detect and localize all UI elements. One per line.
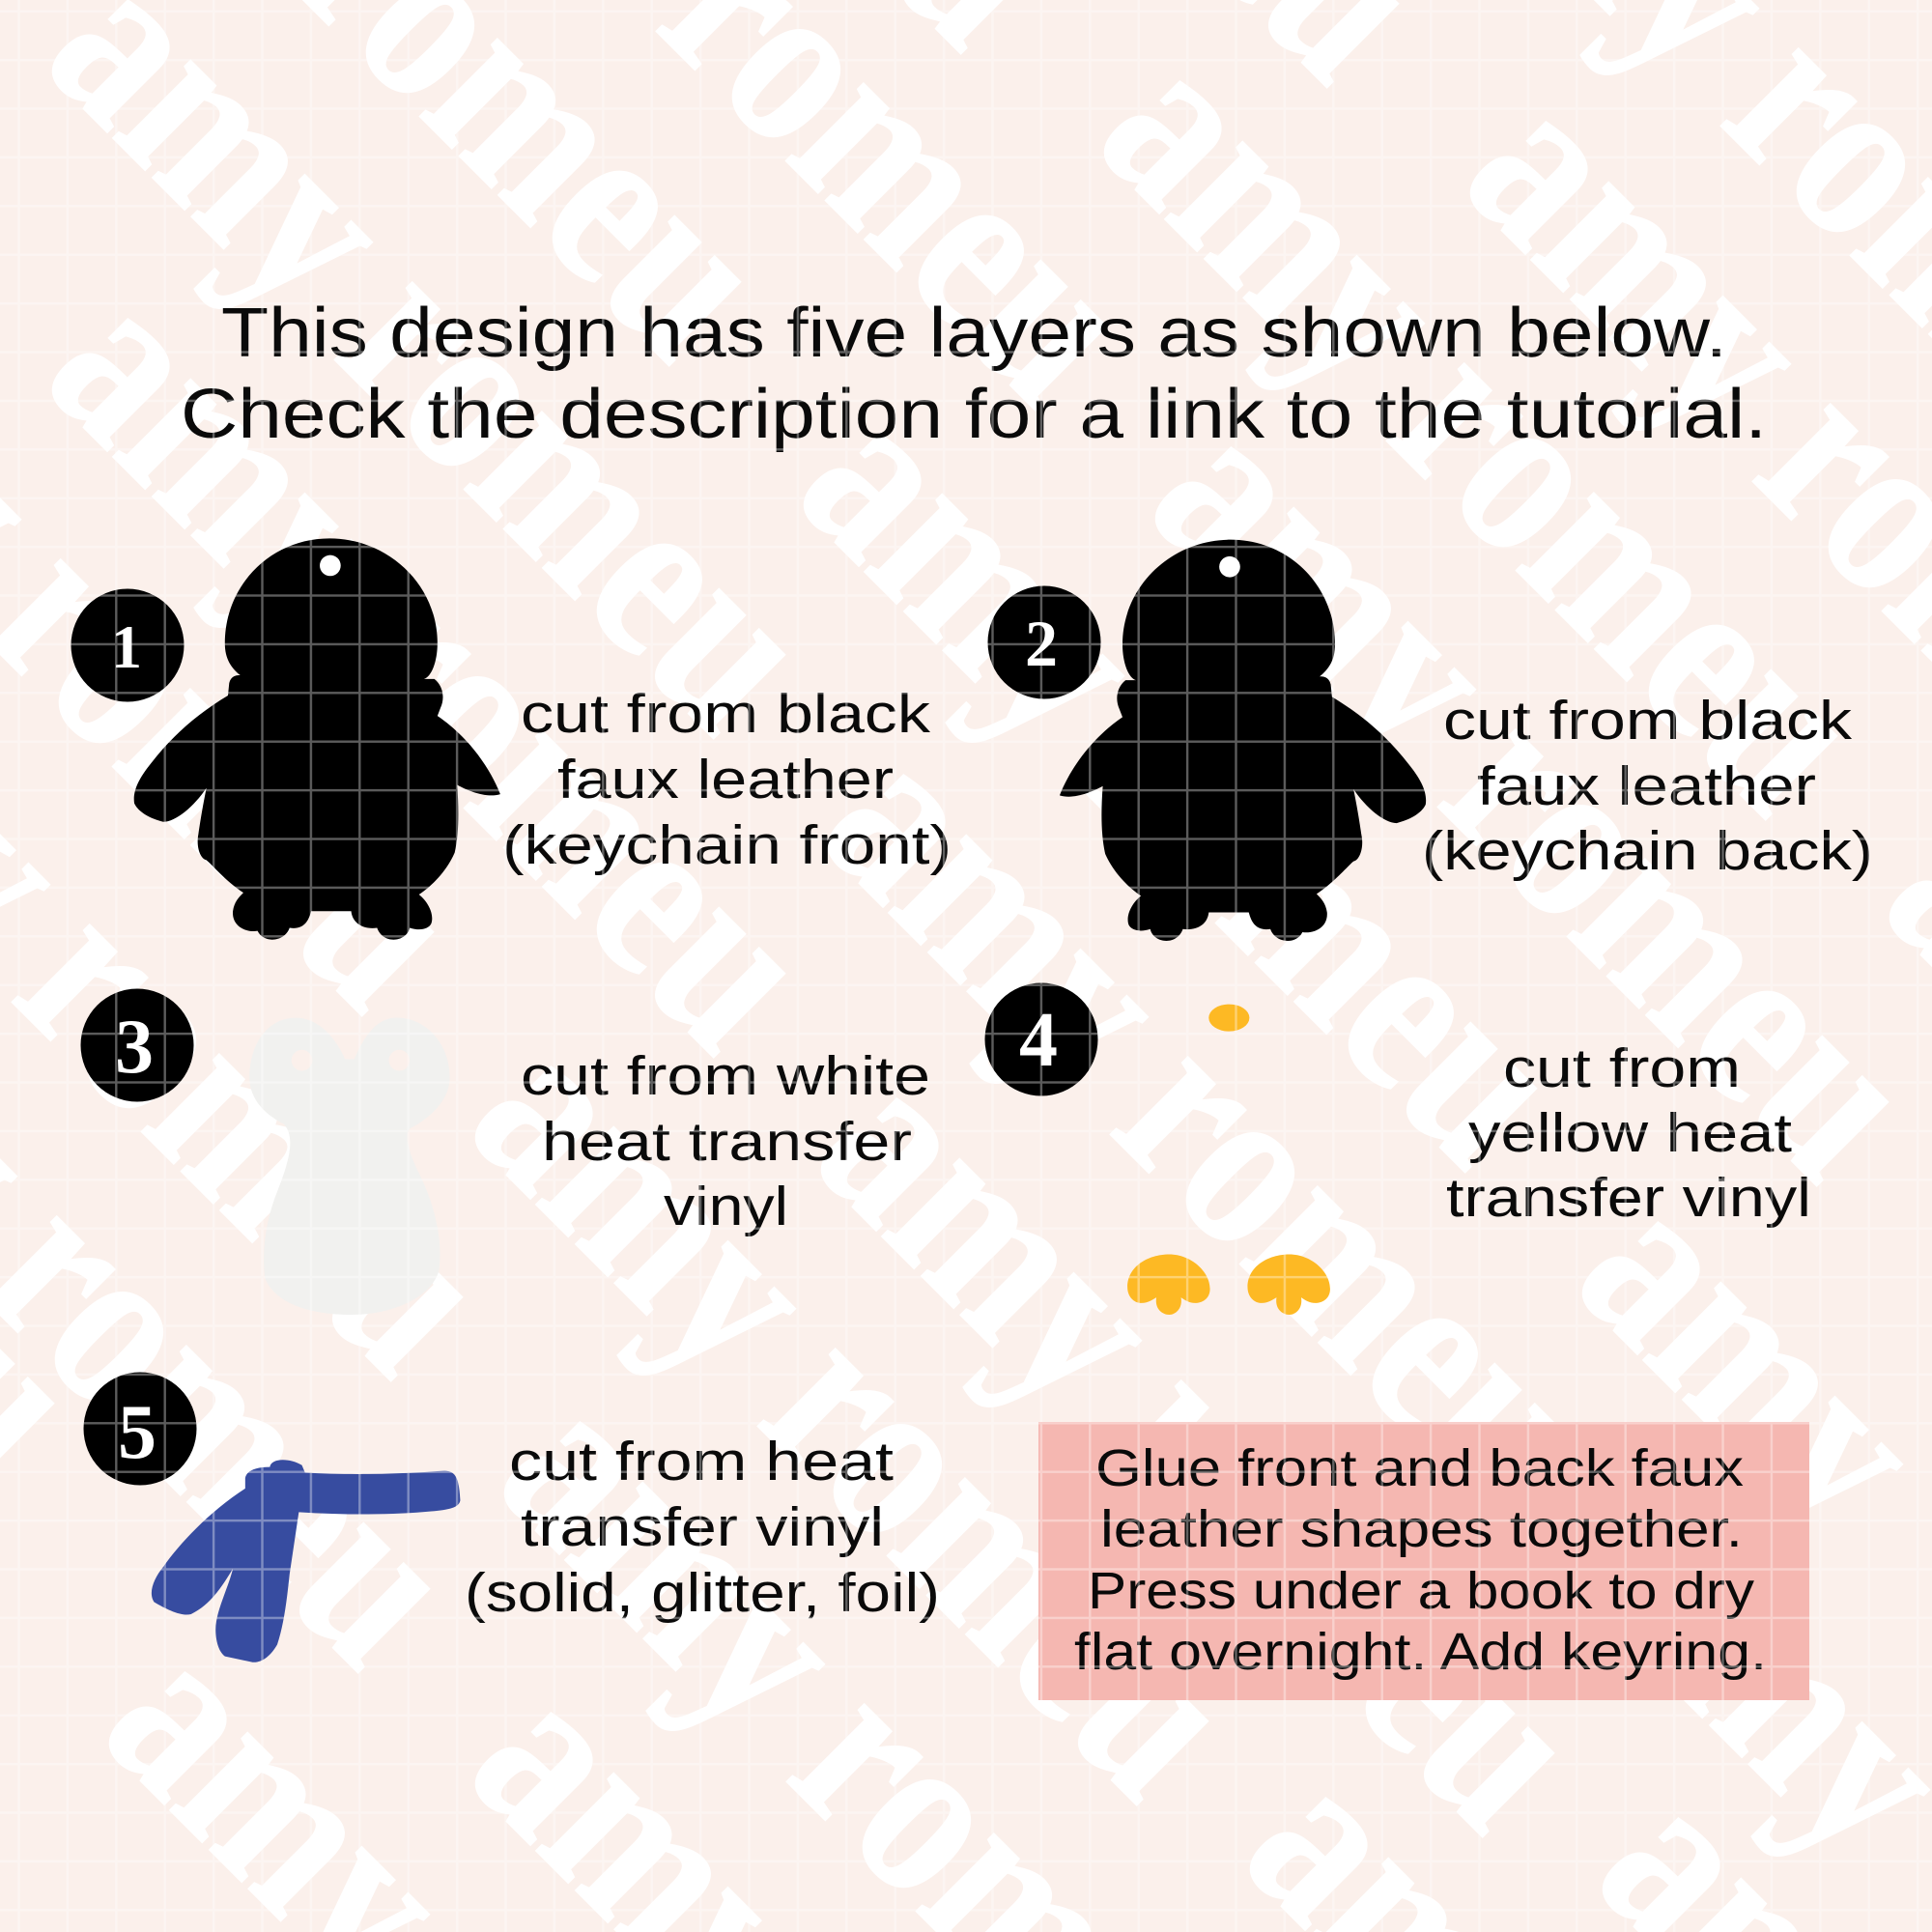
label 5: transfer vinyl: [521, 1496, 884, 1558]
label 3: cut from white: [521, 1045, 930, 1107]
label 5: cut from heat: [509, 1431, 894, 1492]
label 2: faux leather: [1477, 755, 1816, 817]
panel: layer 5: [83, 1372, 940, 1662]
label 4: cut from: [1503, 1037, 1741, 1099]
watermark pattern: amy romeu: [754, 348, 1619, 1212]
panel: layer 1: [71, 538, 952, 940]
title: Check the description for a link to the tutorial.: [181, 376, 1767, 453]
label 2: cut from black: [1443, 690, 1853, 752]
label 4: yellow heat: [1468, 1102, 1792, 1164]
number badge 4: 4: [1019, 998, 1058, 1083]
watermark pattern: amy romeu: [1055, 0, 1919, 860]
number badge 2: [987, 585, 1101, 699]
number badge 1: 1: [111, 612, 142, 681]
callout: glue instructions: Glue front and back faux: [1095, 1439, 1744, 1497]
label 5: [465, 1431, 940, 1624]
label 1: faux leather: [557, 749, 894, 810]
label 3: heat transfer: [542, 1111, 912, 1173]
number badge 4: [985, 983, 1097, 1095]
icon: blue scarf: [152, 1460, 460, 1662]
panel: layer 2: [987, 540, 1873, 941]
callout: glue instructions: leather shapes together.: [1100, 1500, 1743, 1558]
label 1: cut from black: [521, 683, 931, 745]
callout: glue instructions: Press under a book to dry: [1088, 1562, 1754, 1620]
callout: glue instructions: [1038, 1422, 1809, 1700]
watermark pattern: amy romeu: [426, 980, 1291, 1845]
label 5: (solid, glitter, foil): [465, 1562, 940, 1624]
title: [181, 295, 1767, 453]
watermark pattern: amy romeu: [772, 1012, 1636, 1877]
icon: white penguin face and belly: [249, 1018, 450, 1315]
label 2: [1422, 690, 1873, 882]
label 3: [521, 1045, 930, 1237]
icon: yellow beak and feet: [1127, 1005, 1330, 1315]
label 4: transfer vinyl: [1446, 1167, 1811, 1229]
label 1: [502, 683, 952, 876]
label 2: (keychain back): [1422, 820, 1873, 882]
number badge 5: 5: [118, 1390, 156, 1475]
watermark pattern: amy romeu: [779, 689, 1643, 1553]
number badge 5: [83, 1372, 197, 1486]
label 1: (keychain front): [502, 814, 952, 876]
icon: black penguin back: [1060, 540, 1426, 941]
title: This design has five layers as shown below.: [221, 295, 1727, 372]
number badge 1: [71, 589, 184, 701]
label 3: vinyl: [664, 1176, 788, 1237]
panel: layer 3: [81, 989, 930, 1315]
callout: glue instructions: flat overnight. Add keyring.: [1074, 1623, 1767, 1681]
watermark pattern: amy romeu: [3, 233, 867, 1097]
label 4: [1446, 1037, 1811, 1229]
panel: layer 4: [985, 983, 1811, 1315]
number badge 2: 2: [1025, 607, 1058, 680]
number badge 3: [81, 989, 193, 1101]
icon: black penguin front: [134, 538, 500, 940]
number badge 3: 3: [115, 1005, 154, 1090]
